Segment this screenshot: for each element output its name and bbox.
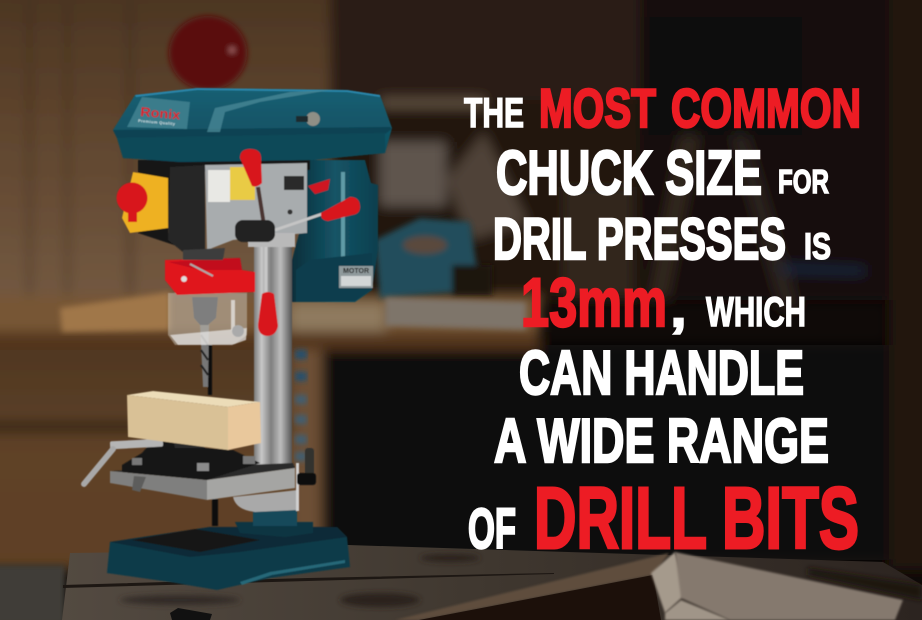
background: blue boxes behind column	[295, 350, 307, 461]
logo plate	[127, 97, 190, 129]
base	[107, 499, 350, 590]
plank on bench	[395, 553, 669, 620]
chuck guard	[168, 293, 247, 345]
switch	[116, 172, 168, 233]
background: red ball	[169, 16, 247, 90]
line 7: DRILL	[534, 470, 707, 567]
line 4: WHICH	[706, 288, 806, 335]
line 4: 13mm	[521, 264, 667, 341]
motor plate	[339, 266, 373, 288]
line 1	[464, 77, 861, 139]
feed handles	[235, 149, 360, 336]
line 2: FOR	[778, 164, 829, 201]
vise	[84, 432, 260, 484]
workbench	[62, 545, 922, 620]
motor plate: MOTOR	[343, 268, 369, 275]
line 4	[521, 264, 806, 341]
small black part on bench	[170, 608, 212, 620]
wood block	[127, 391, 261, 450]
column	[254, 235, 292, 467]
line 1: COMMON	[671, 77, 861, 139]
drill bit	[200, 323, 212, 395]
line 3: DRIL PRESSES	[493, 207, 786, 272]
table	[110, 448, 316, 511]
drill press	[84, 88, 392, 590]
line 1: THE	[464, 89, 524, 136]
motor	[292, 160, 378, 302]
line 5: CAN HANDLE	[519, 338, 804, 408]
line 7	[468, 470, 859, 567]
background: boards on shelf	[60, 292, 526, 332]
line 1: MOST	[539, 77, 656, 139]
head casting	[138, 158, 330, 260]
red depth stop	[165, 258, 255, 295]
headline text	[464, 77, 861, 567]
logo plate: Ronix	[140, 104, 182, 123]
line 2: CHUCK SIZE	[496, 138, 762, 208]
column bracket	[233, 490, 298, 512]
line 4: ,	[671, 284, 686, 337]
line 7: BITS	[722, 470, 859, 567]
logo plate: Premium Quality	[138, 118, 176, 126]
line 3: IS	[804, 225, 831, 267]
line 7: OF	[468, 497, 516, 561]
background: jigsaw	[375, 218, 492, 298]
head cover	[113, 88, 392, 162]
